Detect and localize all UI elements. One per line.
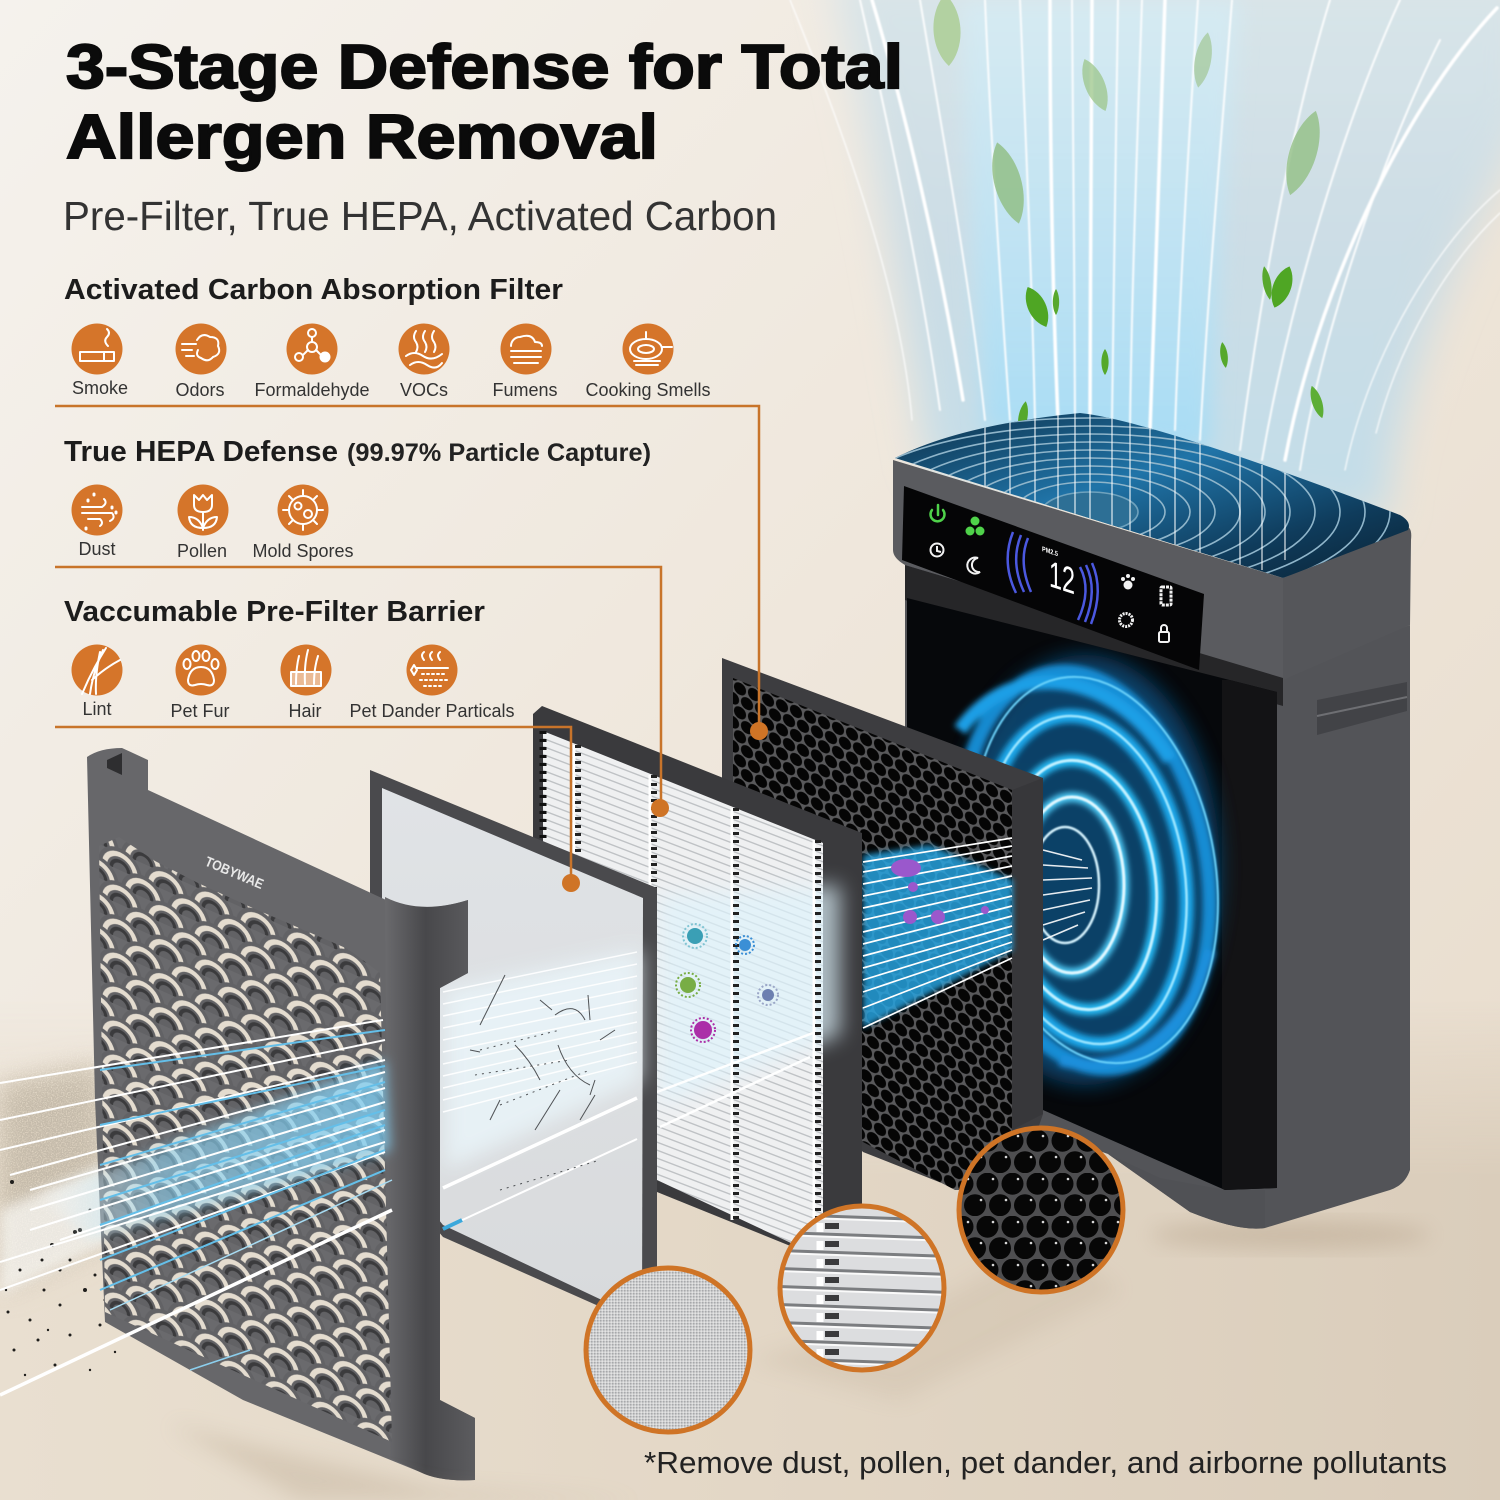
heading: activated carbon: Activated Carbon Absorption Filter <box>64 274 563 306</box>
brand logo: TOBYWAE <box>203 853 266 892</box>
leader: pre-filter <box>55 727 580 892</box>
icon: filter grid <box>1161 587 1171 605</box>
item: formaldehyde <box>254 324 370 400</box>
item: pet fur: Pet Fur <box>170 701 230 721</box>
purifier intake cavity with blue spiral <box>900 590 1285 1200</box>
heading: true HEPA: True HEPA Defense <box>64 436 338 468</box>
leader: true HEPA <box>55 567 669 817</box>
item: formaldehyde: Formaldehyde <box>254 380 370 400</box>
footnote: *Remove dust, pollen, pet dander, and airborne pollutants <box>644 1445 1447 1480</box>
pre-filter mesh panel <box>370 770 657 1332</box>
icon: filter wheel <box>1120 614 1132 626</box>
subtitle: Pre-Filter, True HEPA, Activated Carbon <box>63 193 777 239</box>
item: odors: Odors <box>175 380 225 400</box>
icon: power <box>931 505 945 521</box>
True HEPA filter panel <box>533 706 862 1275</box>
leader: activated carbon <box>55 406 768 740</box>
leader lines <box>55 406 768 892</box>
captured particles <box>676 924 778 1042</box>
air quality arcs left <box>1008 532 1031 593</box>
floating green leaves <box>932 0 1329 434</box>
magnified carbon honeycomb <box>959 1128 1123 1292</box>
icon: lock <box>1159 625 1169 642</box>
title <box>66 33 903 172</box>
icon: sleep <box>967 558 980 574</box>
item: pollen <box>177 484 228 561</box>
purifier top cap <box>893 413 1412 678</box>
item: VOCs: VOCs <box>400 380 448 400</box>
heading: pre-filter: Vaccumable Pre-Filter Barrier <box>64 596 485 628</box>
front cover grille <box>0 748 475 1480</box>
PM2.5 label: PM2.5 <box>1042 545 1058 558</box>
dust cloud entering front cover <box>0 1065 116 1376</box>
heading note: particle capture: (99.97% Particle Capture) <box>347 439 651 467</box>
airflow rising from purifier <box>790 0 1500 520</box>
icon: fan speed <box>966 516 984 536</box>
air purifier unit <box>893 413 1420 1253</box>
title: 3-Stage Defense for Total <box>66 33 903 102</box>
lint and hair debris <box>470 975 615 1190</box>
item: lint <box>72 644 122 719</box>
item: pollen: Pollen <box>177 541 227 561</box>
air quality arcs right <box>1078 563 1098 624</box>
icon: pet mode <box>1121 574 1135 590</box>
icon: timer <box>930 544 944 556</box>
item: dust <box>72 484 122 559</box>
item: odors <box>175 324 226 400</box>
item: fumens: Fumens <box>492 380 558 400</box>
item: hair: Hair <box>288 701 322 721</box>
activated carbon filter panel <box>722 658 1043 1210</box>
item: mold spores <box>252 484 354 561</box>
airflow streaks through cover <box>0 1020 392 1395</box>
section: pre-filter <box>64 596 515 721</box>
purifier floor shadow <box>1150 1221 1430 1249</box>
control panel display <box>902 486 1204 670</box>
item: VOCs <box>398 324 450 400</box>
item: mold spores: Mold Spores <box>252 541 354 561</box>
title: Allergen Removal <box>66 103 658 172</box>
item: lint: Lint <box>82 699 112 719</box>
item: cooking smells <box>585 324 711 400</box>
item: smoke <box>72 324 128 398</box>
section: activated carbon <box>64 274 711 400</box>
item: pet dander <box>349 644 515 721</box>
item: dust: Dust <box>78 539 116 559</box>
item: smoke: Smoke <box>72 378 128 398</box>
item: hair <box>280 644 332 721</box>
item: pet dander: Pet Dander Particals <box>349 701 515 721</box>
item: fumens <box>492 324 558 400</box>
item: cooking smells: Cooking Smells <box>585 380 711 400</box>
section: true HEPA <box>64 436 651 561</box>
magnified HEPA pleats <box>780 1205 944 1371</box>
PM2.5 reading: 12 <box>1049 554 1075 603</box>
floor shadows <box>170 1240 1120 1500</box>
purifier body <box>905 560 1410 1229</box>
item: pet fur <box>170 644 230 721</box>
magnified pre-filter mesh <box>586 1268 750 1432</box>
